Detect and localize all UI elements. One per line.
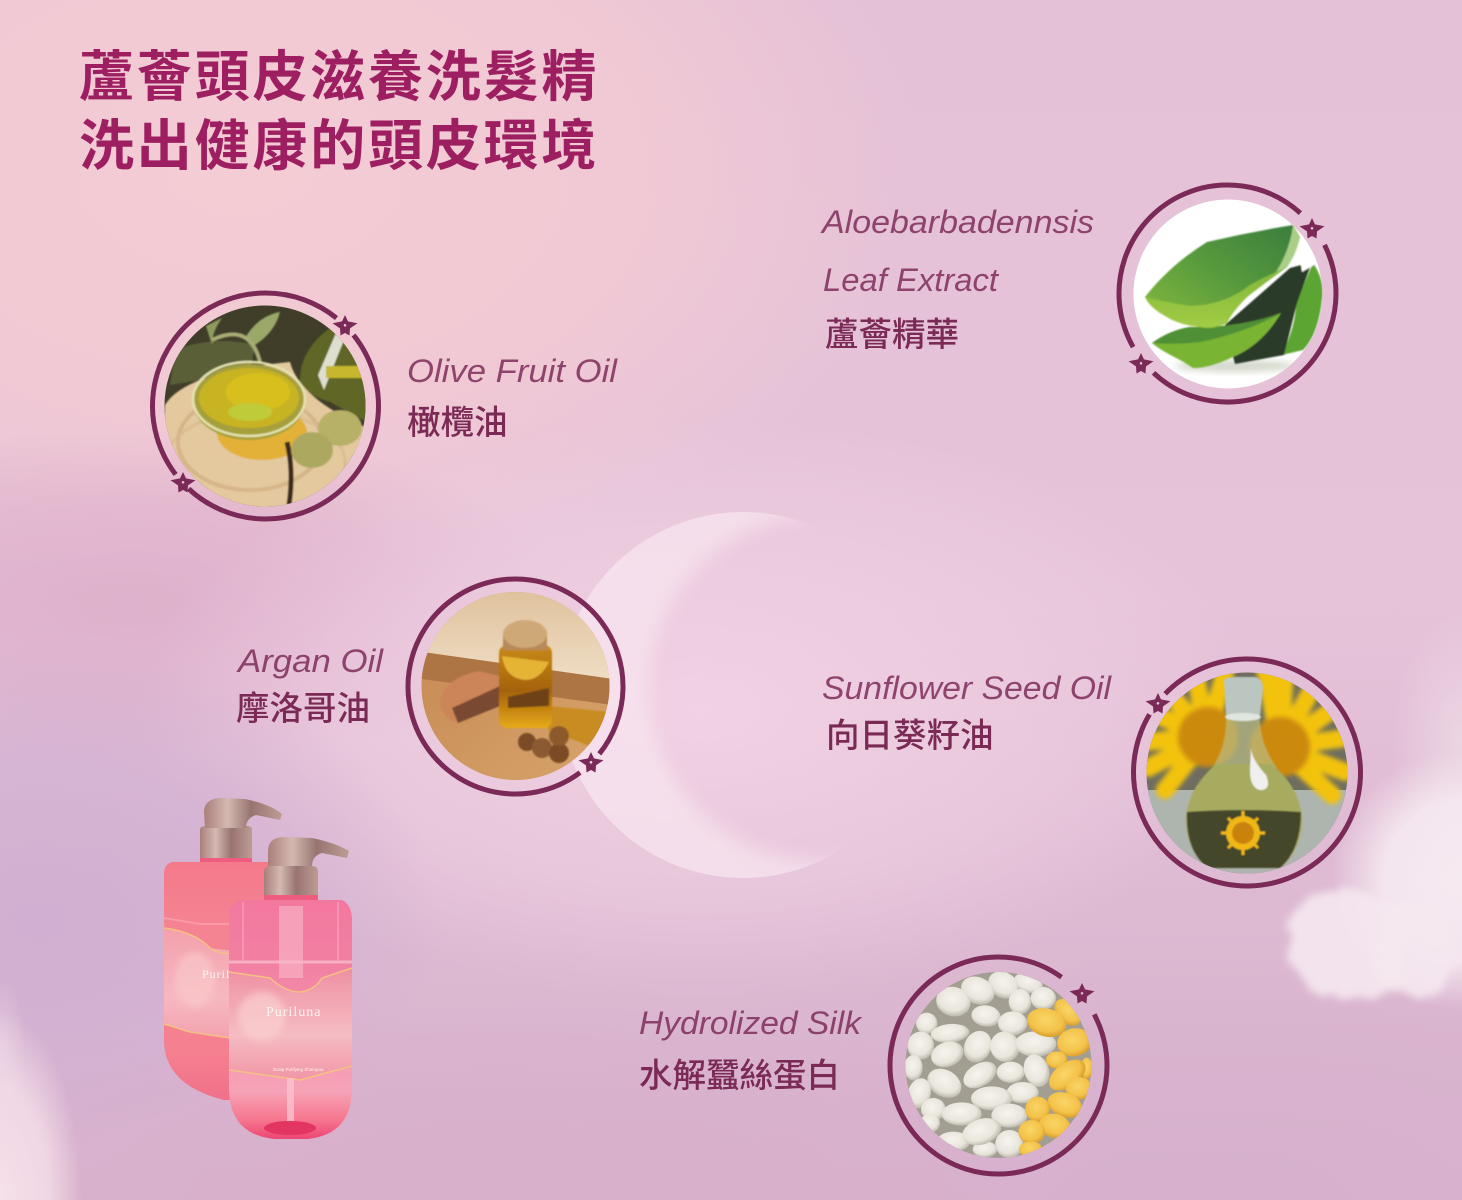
back bottle brand: Puril [202,967,230,981]
aloe label [820,204,1094,354]
argan label [236,643,384,728]
back bottle [164,798,282,1100]
ingredient: sunflower oil [822,612,1407,933]
olive ring [107,247,424,565]
silk label [639,1005,863,1095]
argan ring [365,536,666,837]
silk ring [852,919,1145,1200]
title: 洗出健康的頭皮環境 [79,115,599,177]
olive label: Olive Fruit Oil [407,353,618,389]
sunflower label: 向日葵籽油 [826,718,994,755]
front bottle brand: Puriluna [266,1005,321,1020]
ingredient: aloe [820,182,1338,405]
title [79,46,599,177]
ingredient: argan oil [236,576,626,796]
aloe photo [1133,199,1323,389]
argan label: Argan Oil [236,643,384,679]
aloe label: 蘆薈精華 [825,317,959,354]
silk label: Hydrolized Silk [639,1005,863,1041]
front bottle product name: Scalp Purifying Shampoo [273,1067,324,1072]
cloud: bottom left [0,970,90,1200]
crescent moon [572,512,825,878]
sunflower ring [1087,612,1407,933]
argan photo [422,592,610,780]
olive label [407,353,618,442]
silk photo [906,972,1092,1158]
olive photo [164,306,366,506]
ingredient: silk [640,954,1110,1176]
front bottle [229,837,352,1139]
olive label: 橄欖油 [407,405,508,442]
product: shampoo bottles [164,798,352,1139]
sunflower photo [1146,672,1348,874]
argan label: 摩洛哥油 [236,691,370,728]
sunflower label [822,670,1112,755]
aloe label: Leaf Extract [823,262,999,298]
title: 蘆薈頭皮滋養洗髮精 [79,46,599,108]
sunflower label: Sunflower Seed Oil [822,670,1112,706]
silk label: 水解蠶絲蛋白 [639,1058,840,1095]
aloe ring [1082,148,1373,439]
ingredient: olive oil [150,290,618,522]
cloud: right [1280,600,1462,1020]
aloe label: Aloebarbadennsis [820,204,1094,240]
